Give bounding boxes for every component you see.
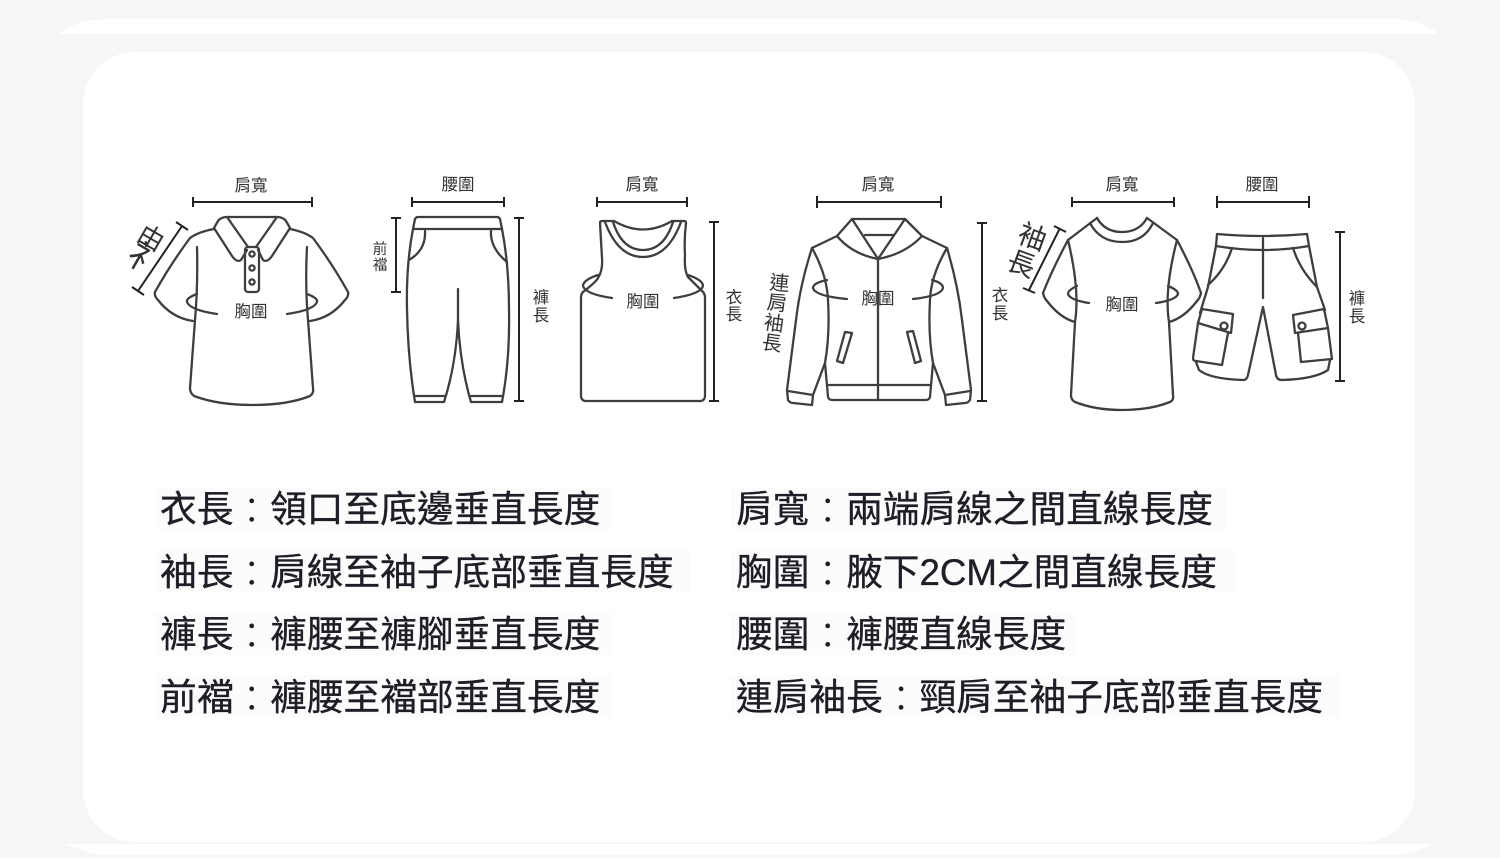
- garment 3: tank top: [581, 175, 743, 401]
- garment 2: long pants: [373, 175, 550, 402]
- tank length measure: 長: [726, 306, 743, 324]
- jacket outline: [787, 219, 971, 405]
- back sheet top edge: [58, 19, 1438, 34]
- tee chest label: 胸圍: [1106, 295, 1138, 314]
- tee shoulder measure: 肩寬: [1106, 175, 1138, 194]
- pants length measure: 長: [533, 307, 550, 325]
- garment 1: polo shirt: [120, 176, 348, 405]
- tank length measure: [709, 222, 743, 401]
- definition: pants length: 褲腰至褲腳垂直長度: [270, 614, 600, 655]
- back sheet bottom edge: [66, 844, 1432, 855]
- tee sleeve measure: [1003, 218, 1066, 293]
- polo chest label: 胸圍: [234, 302, 268, 321]
- definition: shoulder width: ：: [809, 491, 846, 532]
- shorts length measure: [1335, 232, 1366, 381]
- polo sleeve measure: [120, 219, 188, 295]
- tee sleeve measure: 長: [1003, 245, 1040, 283]
- definition: shoulder width: 兩端肩線之間直線長度: [846, 489, 1213, 530]
- definition: pants length: [155, 612, 612, 657]
- definition: garment length: ：: [233, 491, 270, 532]
- definition: waist: 腰圍: [736, 614, 809, 655]
- tee shoulder measure: [1072, 175, 1174, 207]
- shorts length measure: 長: [1349, 308, 1366, 326]
- polo shoulder width measure: [193, 176, 312, 207]
- jacket shoulder measure: [817, 175, 941, 208]
- jacket sleeve label: 長: [760, 332, 783, 356]
- definition: front rise: [155, 675, 612, 720]
- definition: raglan sleeve: [730, 675, 1340, 720]
- definition: sleeve length: [155, 550, 690, 595]
- jacket shoulder measure: 肩寬: [862, 175, 894, 194]
- polo sleeve measure: 礻: [120, 235, 169, 285]
- tee outline: [1043, 218, 1201, 410]
- polo shoulder width measure: 肩寬: [234, 176, 268, 195]
- pants rise measure: 襠: [373, 257, 387, 274]
- definition: raglan sleeve: 頸肩至袖子底部垂直長度: [919, 677, 1323, 718]
- pants length measure: 褲: [533, 288, 549, 307]
- shorts length measure: 褲: [1349, 289, 1365, 308]
- definition: chest: ：: [809, 554, 846, 595]
- shorts waist measure: 腰圍: [1246, 175, 1278, 194]
- tee sleeve measure: 袖: [1014, 218, 1051, 256]
- definition: pants length: 褲長: [160, 614, 233, 655]
- measurement definitions: right column: [730, 487, 1340, 720]
- definition: pants length: ：: [233, 616, 270, 657]
- garment 4: zip jacket: [760, 175, 1009, 405]
- tank chest label: 胸圍: [626, 292, 660, 311]
- definition: garment length: 領口至底邊垂直長度: [270, 489, 600, 530]
- definition: front rise: 前襠: [160, 677, 233, 718]
- definition: sleeve length: ：: [233, 554, 270, 595]
- tank outline: [581, 221, 705, 401]
- definition: chest: 腋下2CM之間直線長度: [846, 552, 1217, 593]
- polo outline: [155, 217, 348, 405]
- tank shoulder measure: [597, 175, 687, 207]
- definition: waist: ：: [809, 616, 846, 657]
- garment 6: cargo shorts: [1193, 175, 1366, 381]
- jacket chest label: 胸圍: [862, 289, 894, 308]
- shorts waist measure: [1217, 175, 1309, 208]
- definition: front rise: 褲腰至襠部垂直長度: [270, 677, 600, 718]
- tank shoulder measure: 肩寬: [626, 175, 658, 194]
- definition: sleeve length: 肩線至袖子底部垂直長度: [270, 552, 674, 593]
- polo sleeve measure: 由: [132, 219, 170, 257]
- definition: front rise: ：: [233, 679, 270, 720]
- pants rise measure: [373, 218, 401, 292]
- definition: shoulder width: 肩寬: [736, 489, 809, 530]
- jacket length measure: 長: [992, 305, 1009, 323]
- jacket sleeve label: 連: [769, 271, 791, 296]
- shorts outline: [1193, 234, 1332, 380]
- pants waist measure: 腰圍: [442, 175, 474, 194]
- definition: shoulder width: [730, 487, 1226, 532]
- definition: raglan sleeve: 連肩袖長: [736, 677, 883, 718]
- pants rise measure: 前: [373, 241, 387, 258]
- jacket length measure: 衣: [992, 286, 1008, 305]
- definition: garment length: [155, 487, 612, 532]
- garment 5: t-shirt: [1003, 175, 1201, 410]
- definition: waist: 褲腰直線長度: [846, 614, 1066, 655]
- definition: raglan sleeve: ：: [883, 679, 919, 720]
- definition: garment length: 衣長: [160, 489, 233, 530]
- definition: chest: 胸圍: [736, 552, 809, 593]
- jacket length measure: [977, 223, 1009, 401]
- jacket sleeve label: 肩: [765, 291, 788, 316]
- tank length measure: 衣: [726, 288, 742, 307]
- definition: sleeve length: 袖長: [160, 552, 233, 593]
- pants outline: [407, 217, 509, 402]
- definition: chest: [730, 550, 1237, 595]
- pants length measure: [514, 218, 550, 401]
- definition: waist: [730, 612, 1075, 657]
- measurement definitions: left column: [155, 487, 690, 720]
- jacket sleeve label: 袖: [762, 311, 785, 336]
- jacket sleeve label: [760, 271, 791, 356]
- pants waist measure: [412, 175, 504, 207]
